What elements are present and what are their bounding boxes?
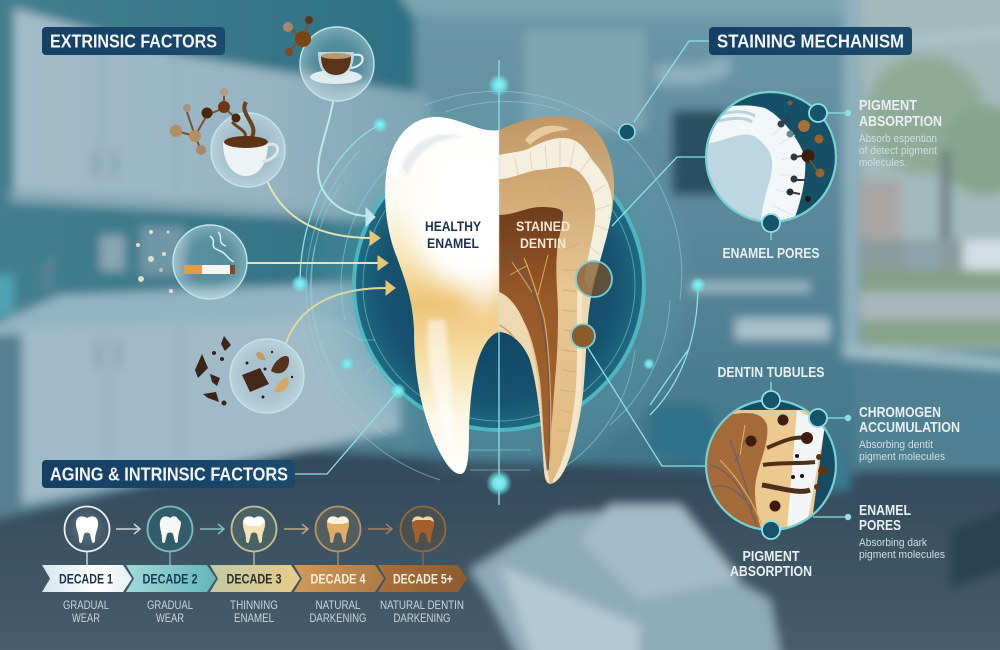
timeline arrows bbox=[116, 524, 392, 534]
decade 3 chevron: DECADE 3 bbox=[226, 572, 282, 586]
decade captions: DARKENING bbox=[394, 611, 450, 625]
central tooth bbox=[385, 110, 624, 490]
nerve branches bbox=[505, 252, 550, 470]
connector lines bbox=[295, 41, 709, 474]
label stained dentin: DENTIN bbox=[520, 236, 566, 251]
label: pigment absorption top bbox=[859, 97, 942, 169]
label: enamel pores right bbox=[859, 502, 945, 561]
decade captions: THINNING bbox=[230, 598, 278, 612]
arrow: food to tooth bbox=[286, 288, 387, 343]
decade 1 icon bbox=[64, 506, 110, 565]
label: pigment absorption top: Absorb espention bbox=[859, 133, 937, 145]
label: pigment absorption top: of detect pigment bbox=[859, 145, 937, 157]
decade captions: DARKENING bbox=[310, 611, 366, 625]
decade captions: NATURAL bbox=[316, 598, 361, 612]
label: dentin tubules: DENTIN TUBULES bbox=[718, 364, 824, 381]
bubble: cigarette bbox=[136, 225, 247, 299]
label: chromogen accumulation: Absorbing dentit bbox=[859, 439, 933, 451]
heading: aging and intrinsic factors: AGING & INTRINSIC FACTORS bbox=[50, 464, 288, 484]
heading: aging and intrinsic factors bbox=[42, 460, 295, 488]
glow nodes bbox=[291, 74, 706, 496]
enamel highlights bbox=[390, 134, 499, 435]
decade 4 chevron: DECADE 4 bbox=[310, 572, 366, 586]
decade captions: GRADUAL bbox=[63, 598, 109, 612]
bubble: coffee cup with steam bbox=[170, 88, 285, 187]
decade 5 icon bbox=[400, 506, 446, 565]
pulp chamber bbox=[499, 207, 563, 472]
decade 4 icon bbox=[316, 506, 360, 565]
decade captions: WEAR bbox=[72, 611, 100, 625]
magnifier on tooth lower bbox=[571, 324, 595, 348]
decade 2 icon bbox=[148, 506, 192, 565]
decade captions: ENAMEL bbox=[234, 611, 274, 625]
label: enamel pores right: PORES bbox=[859, 517, 901, 534]
bubble: food particles bbox=[195, 336, 304, 413]
decade 5 chevron: DECADE 5+ bbox=[393, 572, 453, 586]
label: pigment absorption top: molecules. bbox=[859, 157, 907, 169]
label: pigment absorption bottom bbox=[730, 548, 812, 580]
timeline bbox=[42, 506, 467, 625]
decade 3 chevron bbox=[210, 565, 300, 592]
detail circle: dentin tubules bbox=[700, 382, 851, 540]
label: pigment absorption top: PIGMENT bbox=[859, 97, 917, 114]
label stained dentin: STAINED bbox=[516, 219, 570, 234]
decade captions bbox=[63, 598, 464, 625]
centre seam bbox=[498, 130, 500, 332]
decade 1 chevron bbox=[42, 565, 132, 592]
tooth left half: healthy enamel bbox=[385, 117, 499, 474]
heading: extrinsic factors: EXTRINSIC FACTORS bbox=[50, 32, 217, 52]
label: enamel pores: ENAMEL PORES bbox=[722, 245, 820, 262]
enamel band bbox=[499, 138, 612, 290]
arrow: tea to tooth bbox=[268, 183, 372, 238]
central dark disk bbox=[354, 140, 644, 430]
decade captions: GRADUAL bbox=[147, 598, 193, 612]
label: pigment absorption bottom: PIGMENT bbox=[742, 548, 800, 565]
decade captions: WEAR bbox=[156, 611, 184, 625]
label: pigment absorption top: ABSORPTION bbox=[859, 113, 942, 130]
label healthy enamel: ENAMEL bbox=[427, 236, 479, 251]
label healthy enamel: HEALTHY bbox=[425, 219, 481, 234]
decade 5 chevron bbox=[378, 565, 467, 592]
detail circle: enamel pores bbox=[700, 90, 851, 240]
circuit rings bbox=[300, 60, 698, 505]
arrow: cigarette to tooth bbox=[247, 262, 380, 264]
halo behind tooth bbox=[299, 85, 699, 485]
label: enamel pores right: Absorbing dark bbox=[859, 537, 927, 549]
label: chromogen accumulation: CHROMOGEN bbox=[859, 404, 941, 421]
decade captions: NATURAL DENTIN bbox=[380, 598, 464, 612]
heading: staining mechanism bbox=[709, 27, 912, 55]
label stained dentin bbox=[516, 219, 570, 251]
arrows from bubbles bbox=[247, 102, 395, 343]
tooth right half: stained cross-section bbox=[499, 116, 614, 484]
label: enamel pores right: pigment molecules bbox=[859, 549, 945, 561]
label: pigment absorption bottom: ABSORPTION bbox=[730, 563, 812, 580]
heading: extrinsic factors bbox=[42, 27, 225, 55]
decade 1 chevron: DECADE 1 bbox=[59, 572, 113, 586]
label healthy enamel bbox=[425, 219, 481, 251]
decade 2 chevron: DECADE 2 bbox=[142, 572, 198, 586]
label: chromogen accumulation: ACCUMULATION bbox=[859, 419, 960, 436]
arrow: coffee to tooth bbox=[318, 102, 368, 216]
root inner band bbox=[499, 292, 547, 480]
decade 2 chevron bbox=[126, 565, 216, 592]
label: chromogen accumulation: pigment molecules bbox=[859, 451, 945, 463]
heading: staining mechanism: STAINING MECHANISM bbox=[717, 32, 904, 52]
decade 4 chevron bbox=[294, 565, 384, 592]
label: enamel pores right: ENAMEL bbox=[859, 502, 911, 519]
decade 3 icon bbox=[232, 506, 276, 565]
label: chromogen accumulation bbox=[859, 404, 960, 463]
magnifier on tooth upper bbox=[576, 261, 612, 297]
bubble: espresso cup bbox=[283, 16, 374, 101]
dentin bbox=[499, 167, 595, 486]
